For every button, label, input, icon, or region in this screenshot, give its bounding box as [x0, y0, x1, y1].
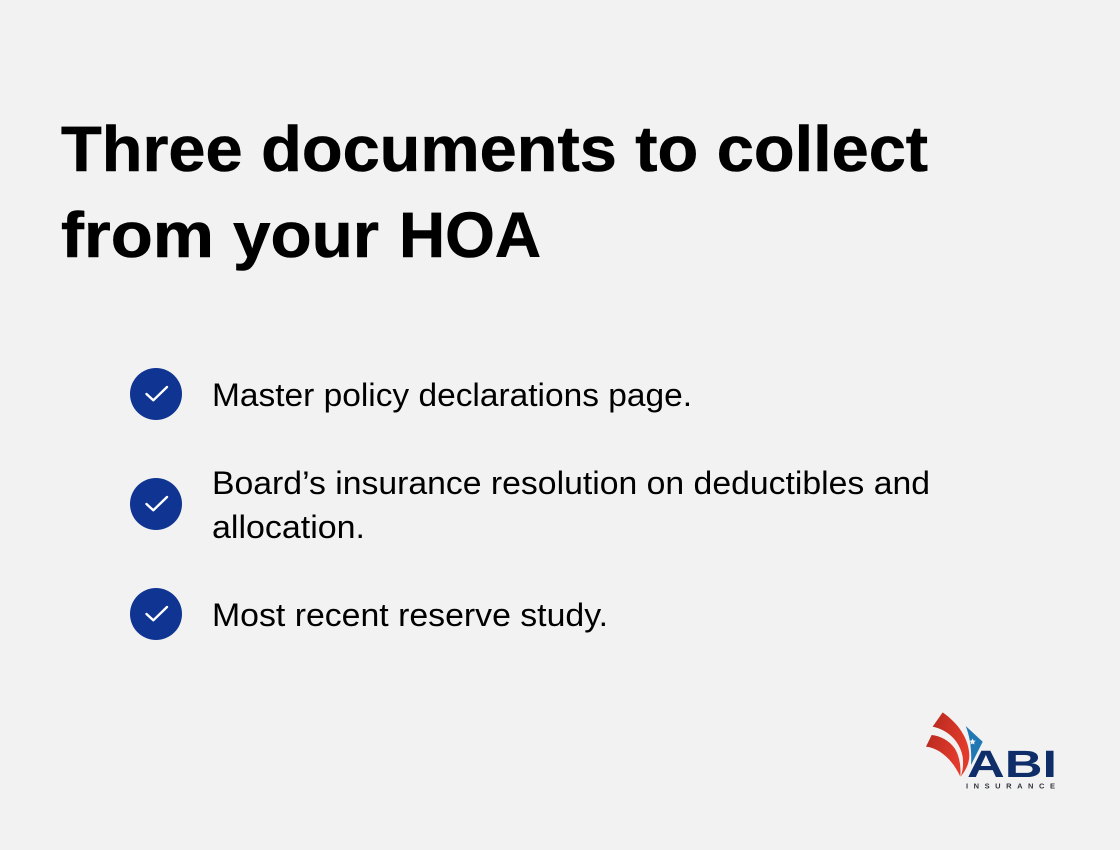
title: HOA	[399, 199, 541, 271]
title: your	[233, 199, 379, 271]
checklist	[130, 368, 930, 640]
wordmark: ABI	[967, 744, 1057, 786]
title	[61, 113, 928, 271]
item: master policy	[130, 368, 692, 420]
item: board resolution	[130, 465, 930, 545]
title: from	[61, 199, 214, 271]
title: Three documents to collect	[61, 113, 928, 185]
icon: star	[969, 738, 976, 744]
item: board resolution: Board’s insurance resolution on deductibles and	[212, 465, 930, 501]
icon: blue flag	[966, 726, 983, 765]
icon: red wing	[926, 712, 969, 777]
item: board resolution: allocation.	[212, 509, 365, 545]
item: reserve study	[130, 588, 608, 640]
tagline: INSURANCE	[966, 782, 1055, 790]
item: reserve study: Most recent reserve study.	[212, 597, 608, 633]
item: master policy: Master policy declarations page.	[212, 377, 692, 413]
logo: ABI Insurance	[926, 712, 1057, 790]
